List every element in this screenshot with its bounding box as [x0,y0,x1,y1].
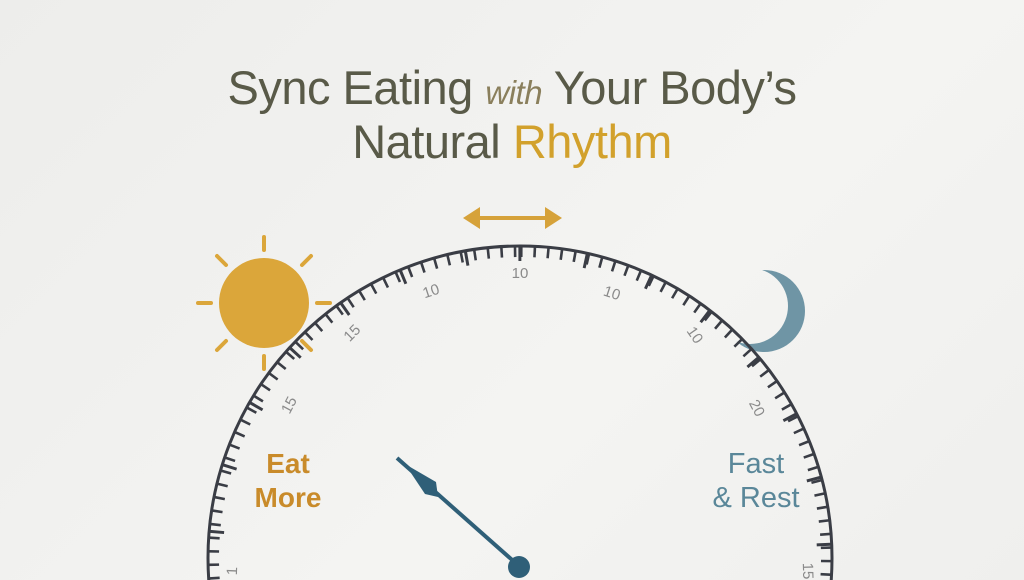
dial numbers: 10 [512,265,528,282]
dial numbers: 15 [278,394,301,417]
needle [397,458,530,578]
dial numbers: 10 [601,283,622,304]
dial numbers: 10 [683,324,706,347]
dial numbers: 10 [421,281,442,302]
icon: moon [736,270,805,352]
icon: sun [198,237,330,369]
label: eat more: More [255,482,321,513]
dial numbers [224,265,816,580]
title [227,61,796,168]
label: eat more [255,448,321,513]
dial numbers: 1 [224,567,241,575]
label: fast & rest [712,448,800,514]
title: Natural Rhythm [352,115,672,168]
title: Sync Eating with Your Body’s [227,61,796,114]
label: fast & rest: Fast [728,448,784,480]
dial numbers: 15 [340,321,364,345]
dial numbers: 20 [745,397,768,420]
label: eat more: Eat [266,448,310,479]
dial chart [196,207,834,580]
arrow: double-headed [463,207,562,229]
label: fast & rest: & Rest [712,482,800,514]
dial numbers: 15 [799,562,816,580]
dial arc with ticks [208,246,832,580]
